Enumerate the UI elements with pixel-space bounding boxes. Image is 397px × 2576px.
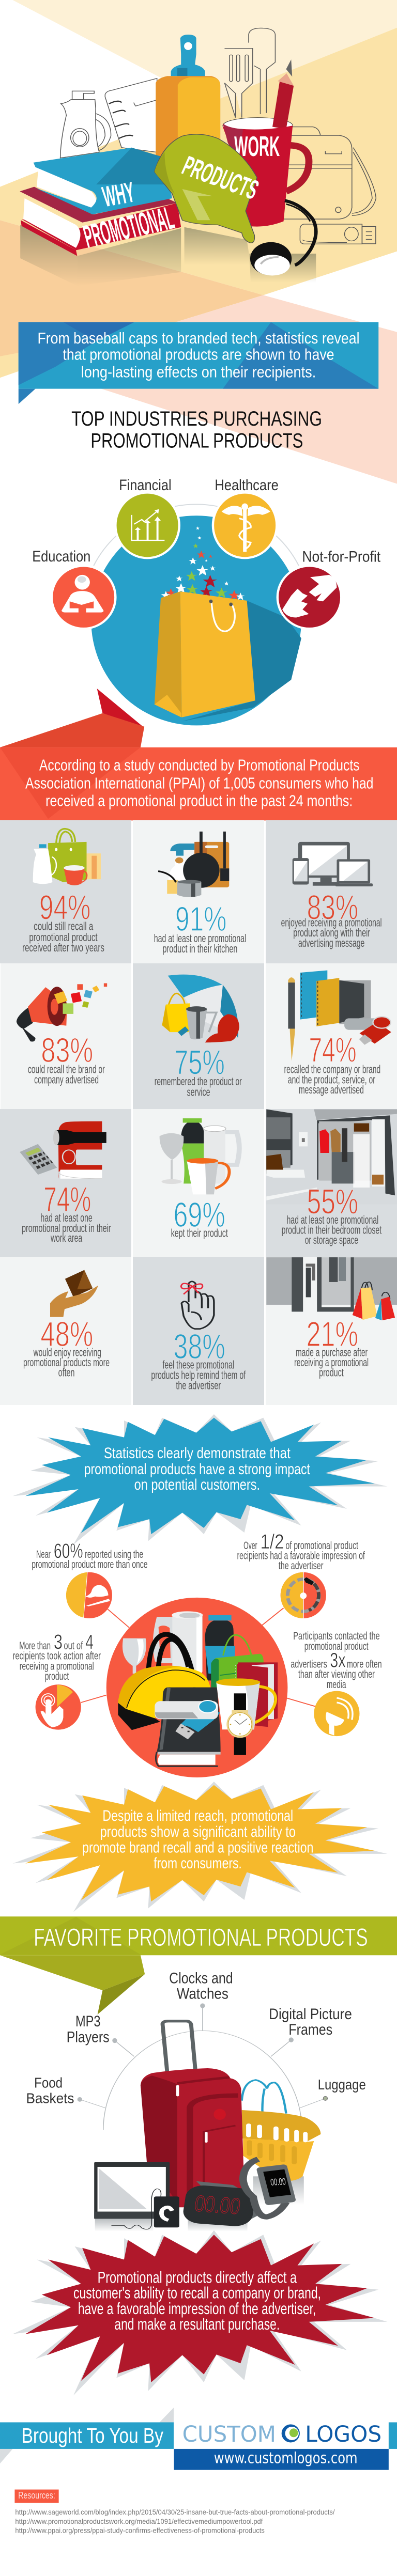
label: Education: Education	[32, 548, 90, 565]
icon: not-for-profit	[278, 566, 341, 629]
icon: touch hand circle	[36, 1684, 81, 1730]
stat: 94%: 94%	[39, 887, 90, 927]
resources list: http://www.promotionalproductswork.org/media/1091/effectivemediumpowertool.pdf	[15, 2517, 263, 2525]
yellow burst callout: Despite a limited reach, promotional	[102, 1807, 293, 1824]
stat: 75%	[155, 1042, 242, 1098]
icon: work area products	[20, 1121, 106, 1179]
red burst callout: and make a resultant purchase.	[114, 2316, 280, 2334]
resources label: Resources:	[18, 2490, 55, 2501]
icon: healthcare	[213, 493, 277, 558]
blue burst callout: on potential customers.	[134, 1476, 260, 1493]
icon: usb drive	[155, 1700, 221, 1739]
icon: yellow duffel bag	[118, 1634, 210, 1730]
resources list	[15, 2508, 335, 2535]
stat: 48%: often	[58, 1366, 74, 1379]
stat: 48%	[23, 1314, 110, 1379]
label: MP3 Players	[67, 2013, 110, 2046]
callout: over 1/2: 1/2	[261, 1530, 284, 1553]
PPAI study section	[0, 713, 397, 820]
icon: smart watch	[243, 2159, 296, 2217]
label: Healthcare: Healthcare	[215, 476, 279, 494]
icon: kitchen products	[158, 832, 229, 897]
stat: 69%: kept their product	[171, 1227, 228, 1240]
hero section: WORK	[234, 131, 280, 162]
label: Not-for-Profit: Not-for-Profit	[302, 548, 381, 565]
favorite products section	[0, 1782, 397, 2056]
icon: spatula and spoon outlines	[224, 28, 275, 118]
stat: 83% enjoyed	[281, 887, 382, 949]
callout: 3x	[291, 1630, 382, 1691]
products in big circle	[118, 1611, 278, 1766]
icon: alarm clock	[181, 2181, 257, 2227]
big circle with products	[106, 1598, 287, 1777]
footer fold triangles	[0, 2408, 174, 2463]
study banner	[0, 747, 397, 820]
hero section: WHY	[100, 176, 138, 213]
callout: 3 out of 4: More than	[19, 1640, 51, 1652]
label: Digital Picture Frames	[269, 2005, 352, 2038]
label: Clocks and Watches: Clocks and	[169, 1970, 233, 1987]
icon: notebook outline	[105, 79, 157, 152]
icon: bedroom closet	[266, 1109, 397, 1204]
grid rows 3 and 4: promotional products more	[23, 1356, 110, 1369]
icon: devices	[293, 842, 373, 886]
callout: near 60%: 60%	[54, 1539, 83, 1563]
icon: megaphone	[17, 983, 107, 1041]
callout: near 60%: Near	[36, 1548, 51, 1560]
yellow burst callout: from consumers.	[154, 1854, 242, 1872]
stat: 21%: 21%	[307, 1314, 358, 1354]
shadows	[95, 2176, 304, 2231]
icon: luggage	[141, 2021, 245, 2207]
label: Clocks and Watches: Watches	[177, 1985, 228, 2002]
hero section	[0, 0, 397, 484]
stat: 94%: could still recall a	[34, 919, 94, 932]
icon: dark book	[156, 1688, 221, 1766]
red burst callout: customer's ability to recall a company or brand,	[73, 2285, 321, 2302]
logo: custom logos: CUSTOM	[182, 2422, 276, 2447]
red burst callout	[12, 2230, 387, 2395]
heading: PROMOTIONAL PRODUCTS	[90, 429, 303, 452]
red burst callout: have a favorable impression of the advertiser,	[78, 2300, 316, 2318]
callout: 3x: 3x	[330, 1648, 346, 1672]
stat: 83% recall: 83%	[41, 1031, 93, 1069]
label: Food Baskets: Food	[34, 2075, 63, 2091]
icon: white mug	[216, 1678, 276, 1729]
stat: 94%: promotional product	[29, 931, 98, 944]
callout: near 60%	[32, 1539, 148, 1570]
icon: yellow basket	[242, 2110, 321, 2181]
icon: bottles and mugs	[160, 1118, 239, 1194]
blue burst callout: promotional products have a strong impact	[84, 1460, 310, 1478]
ribbon fold	[0, 713, 144, 747]
icon: green cap	[155, 134, 257, 243]
stat: 74% recalled: 74%	[309, 1030, 357, 1069]
callout: 3 out of 4: 3	[54, 1630, 63, 1653]
icon: red notebook	[236, 1662, 278, 1727]
yellow burst callout	[12, 1782, 387, 1912]
stat: 83% enjoyed: 83%	[307, 887, 358, 927]
icon: picture frame	[94, 2162, 170, 2219]
stat: 94%: received after two years	[22, 941, 104, 954]
stat: 74% work area: 74%	[43, 1179, 91, 1219]
icon: jug outline	[60, 91, 111, 158]
red burst callout: Promotional products directly affect a	[98, 2269, 297, 2287]
callout: over 1/2	[237, 1530, 365, 1572]
stat: 91%: had at least one promotional	[154, 932, 246, 945]
stat: 74% work area: promotional product in their	[22, 1222, 111, 1235]
blue burst callout	[12, 1414, 387, 1544]
icon: usb outline	[300, 224, 376, 244]
yellow burst callout: products show a significant ability to	[100, 1823, 296, 1840]
blue burst callout: Statistics clearly demonstrate that	[104, 1444, 291, 1461]
label: Financial: Financial	[119, 476, 172, 494]
grid rows 1 and 2	[17, 829, 391, 1098]
callout: 3 out of 4: product	[45, 1670, 69, 1682]
callout: near 60%: promotional product more than once	[32, 1558, 148, 1570]
dome ring and pointers	[78, 2031, 327, 2130]
callout: 3 out of 4: recipients took action after	[12, 1649, 101, 1662]
icon: stacked books	[20, 148, 181, 256]
icon: umbrella, bag, mug, cap	[162, 975, 239, 1042]
icon: stars	[161, 526, 245, 600]
icon: bag outline	[284, 127, 376, 219]
callout: 3 out of 4: out of	[64, 1640, 83, 1652]
stat: 48%: would enjoy receiving	[33, 1346, 101, 1359]
stat: 91%: product in their kitchen	[162, 942, 237, 955]
hero section: PROMOTIONAL	[80, 199, 178, 255]
stat: 74% work area: work area	[50, 1232, 83, 1244]
icon: mug with pencil	[223, 59, 309, 227]
object shadows	[20, 225, 316, 286]
stat: 75%: 75%	[174, 1042, 225, 1082]
stat: 21%	[294, 1314, 369, 1379]
stat: 38%	[151, 1326, 246, 1392]
brought to you by band	[0, 2422, 397, 2449]
background facets	[0, 0, 397, 484]
callout: over 1/2: the advertiser	[279, 1559, 324, 1572]
stat: 94%	[22, 887, 104, 954]
grid rows 3 and 4	[20, 1109, 397, 1392]
icon: financial	[115, 493, 179, 558]
logo: custom logos: www.customlogos.com	[214, 2449, 358, 2467]
stat: 74% work area	[22, 1179, 111, 1244]
stat: 83% recall: could recall the brand or	[28, 1063, 105, 1075]
stat: 55%: 55%	[307, 1182, 358, 1221]
icon: wristwatch	[226, 1693, 253, 1755]
label: MP3 Players: Players	[67, 2028, 110, 2046]
callout: 3x: media	[327, 1678, 346, 1691]
label: Food Baskets: Baskets	[26, 2090, 74, 2106]
icon: hand with gift	[50, 1270, 98, 1317]
stat: 38%: feel these promotional	[162, 1359, 234, 1371]
stat: 74% work area: had at least one	[40, 1212, 93, 1224]
statistics grid	[0, 820, 397, 1405]
green heading band	[0, 1916, 397, 1955]
icon: green bag	[211, 1635, 264, 1688]
stat: 55%	[282, 1182, 381, 1246]
stat: 91%: 91%	[175, 899, 226, 938]
luggage scene	[26, 2021, 366, 2231]
intro banner	[19, 322, 378, 404]
impact section	[12, 1414, 387, 1777]
stat: 21%: product	[319, 1366, 344, 1379]
stat: 38%: the advertiser	[176, 1379, 221, 1392]
icon: wine glass	[123, 1638, 146, 1674]
icon: satellite circle	[314, 1691, 360, 1736]
text on cap: PRODUCTS: PRODUCTS	[178, 150, 263, 205]
stat: 69%	[171, 1195, 228, 1240]
icon: cap and pen circle	[66, 1572, 112, 1618]
logo: custom logos	[174, 2422, 389, 2470]
icon: dial circle	[281, 1572, 326, 1618]
label: Digital Picture Frames: Frames	[288, 2021, 332, 2038]
icon: education	[52, 566, 115, 629]
callout: 3x: advertisers	[291, 1658, 327, 1670]
label: Clocks and Watches	[169, 1970, 233, 2002]
green ribbon fold	[0, 1955, 145, 2015]
stat: 75%: service	[187, 1085, 210, 1098]
icon: water bottle	[205, 1615, 235, 1680]
stat: 83% recall	[28, 1031, 105, 1086]
stat: 75%: remembered the product or	[155, 1075, 242, 1088]
icon: finger with ribbon	[181, 1282, 214, 1329]
label: Food Baskets	[26, 2075, 74, 2106]
grid rows 3 and 4: products help remind them of	[151, 1369, 246, 1382]
intro banner: long-lasting effects on their recipients.	[81, 363, 316, 381]
label: Digital Picture Frames: Digital Picture	[269, 2005, 352, 2023]
icon: mp3 player	[112, 2189, 179, 2229]
connector lines	[81, 1608, 315, 1707]
pointers	[113, 2004, 293, 2056]
stat: 48%: 48%	[40, 1314, 93, 1354]
callout: 3 out of 4: receiving a promotional	[20, 1660, 94, 1672]
closing section	[0, 2230, 397, 2535]
stat: 69%: 69%	[174, 1195, 225, 1235]
blue circle	[91, 516, 301, 725]
ribbon fold top	[97, 689, 144, 728]
icon: bottle	[156, 35, 220, 159]
ring arcs	[94, 504, 299, 566]
stat: 91%	[154, 899, 246, 955]
icon: alarm clock: 00.00	[193, 2191, 242, 2219]
callout: over 1/2: Over	[243, 1539, 257, 1552]
icon: blue basket handles	[242, 2080, 286, 2142]
intro banner: that promotional products are shown to have	[63, 346, 334, 363]
icon: pen, notebooks, usb	[288, 971, 391, 1061]
icon: doorway and shopping bags	[266, 1257, 397, 1320]
top industries section	[32, 407, 381, 728]
stat: 74% recalled	[284, 1030, 380, 1096]
stat: 38%: 38%	[174, 1326, 225, 1366]
icon: beer mug	[153, 1611, 203, 1673]
icon: earphones	[250, 200, 316, 275]
label: MP3 Players: MP3	[75, 2013, 100, 2030]
callout: 3 out of 4	[12, 1630, 101, 1682]
icon: bag, jug, mug	[33, 829, 101, 885]
brought to you by band: Brought To You By	[22, 2425, 163, 2448]
resources list: http://www.sageworld.com/blog/index.php/2015/04/30/25-insane-but-true-facts-about-promotional-products/	[15, 2508, 335, 2516]
resources list: http://www.ppai.org/press/ppai-study-confirms-effectiveness-of-promotional-products	[15, 2526, 265, 2535]
callout: 3 out of 4: 4	[85, 1630, 94, 1653]
heading	[71, 407, 322, 452]
bag shadow	[182, 601, 301, 721]
stat: 83% recall: company advertised	[34, 1073, 99, 1086]
icon: smart watch: 00.00	[270, 2176, 286, 2188]
callout: near 60%: reported using the	[85, 1548, 143, 1560]
logo: custom logos: LOGOS	[305, 2422, 381, 2447]
icon: shopping bag	[155, 591, 255, 717]
